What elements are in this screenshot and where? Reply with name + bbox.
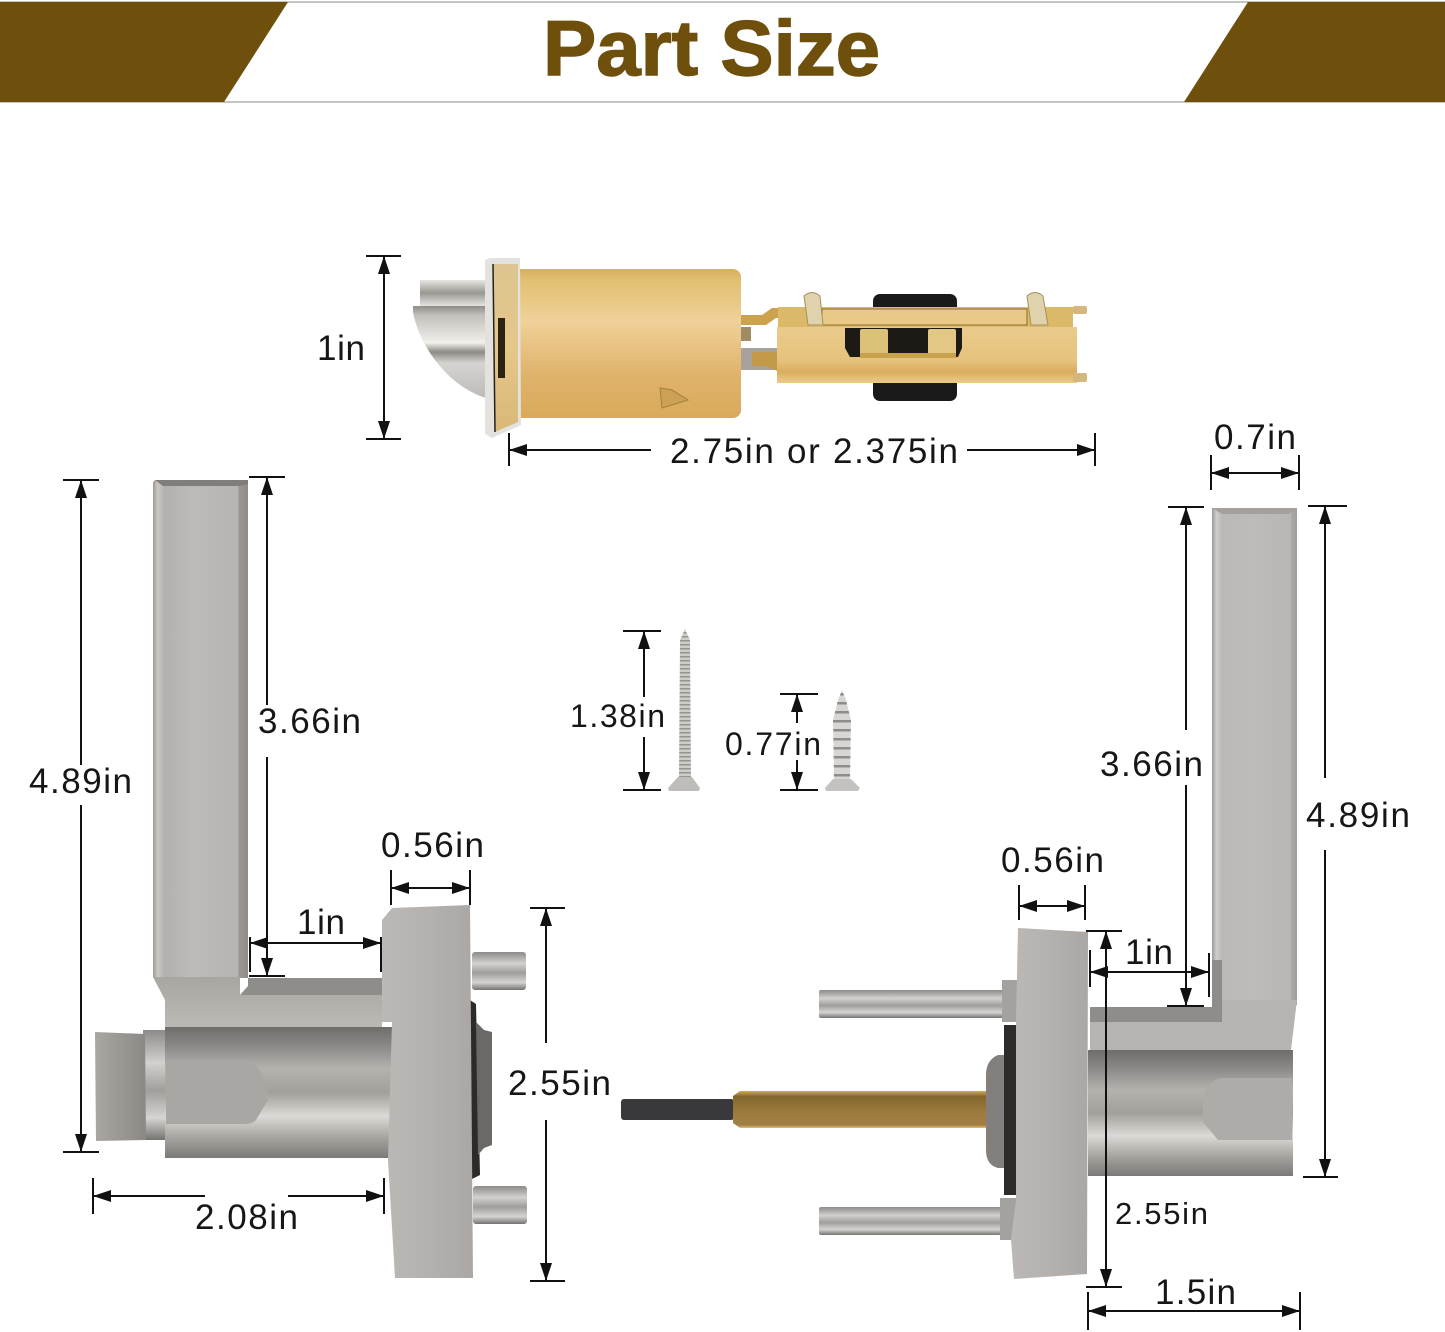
right back hub — [1004, 1025, 1017, 1195]
dimension: left plate height 2.55in — [508, 908, 611, 1281]
right lever — [621, 508, 1297, 1279]
dimension: handle width 0.7in: 0.7in — [1214, 418, 1296, 457]
dimension: left handle 3.66in — [249, 477, 361, 976]
dimension: right overall height 4.89in: 4.89in — [1306, 796, 1410, 835]
screw: short — [825, 690, 860, 791]
right barrel — [1088, 1050, 1293, 1176]
left back hub — [470, 1000, 480, 1180]
dimension: deadbolt length: 2.75in or 2.375in — [670, 432, 958, 471]
latch tabs — [804, 292, 823, 325]
cylinder — [512, 269, 741, 418]
screw: long — [668, 629, 700, 791]
right studs — [819, 990, 1004, 1018]
dimension: left depth 2.08in — [93, 1178, 384, 1237]
black rod — [621, 1099, 734, 1120]
dimension: right gap 1in — [1090, 933, 1209, 997]
brass spindle — [733, 1091, 986, 1128]
dimension: right plate height 2.55in: 2.55in — [1115, 1196, 1208, 1231]
right rose plate — [1011, 928, 1088, 1279]
dimension: left gap 1in: 1in — [297, 903, 345, 942]
dimension: right handle 3.66in — [1100, 507, 1204, 1006]
right banner accent — [1184, 2, 1445, 102]
dimension: left gap 1in — [250, 903, 381, 972]
dimension: right gap 1in: 1in — [1125, 933, 1173, 972]
cylinder notch — [660, 388, 688, 408]
dimension: deadbolt length — [509, 432, 1095, 471]
bolt nose — [420, 280, 486, 306]
dimension: left handle 3.66in: 3.66in — [258, 702, 361, 741]
dimension: left plate height 2.55in: 2.55in — [508, 1064, 611, 1103]
dimension: right plate 0.56in: 0.56in — [1001, 841, 1104, 880]
dimension: deadbolt height 1in — [317, 256, 401, 439]
dimension: left depth 2.08in: 2.08in — [195, 1198, 298, 1237]
dimension: handle width 0.7in — [1211, 418, 1299, 490]
left banner accent — [0, 2, 288, 102]
dimension: right depth 1.5in: 1.5in — [1155, 1273, 1236, 1312]
dimension: deadbolt height 1in: 1in — [317, 329, 365, 368]
dimension: short screw 0.77in: 0.77in — [725, 726, 821, 762]
latch prongs — [1073, 306, 1087, 314]
left lever — [95, 480, 527, 1278]
dimension: left plate 0.56in: 0.56in — [381, 826, 484, 865]
left studs — [472, 952, 526, 990]
right handle — [1212, 508, 1297, 1005]
black roller — [873, 294, 957, 401]
dimension: short screw 0.77in — [725, 694, 821, 790]
linkage — [741, 308, 782, 325]
header banner — [0, 2, 1445, 102]
left handle — [153, 480, 248, 978]
face plate — [485, 258, 521, 438]
dimension: right depth 1.5in — [1088, 1273, 1300, 1330]
dimension: right plate 0.56in — [1001, 841, 1104, 920]
title: Part Size — [543, 4, 880, 92]
left rose plate — [382, 905, 473, 1278]
dimension: right plate height 2.55in — [1086, 931, 1208, 1287]
latch body — [777, 327, 1077, 383]
dimension: long screw 1.38in — [570, 631, 665, 790]
latch top bar — [778, 307, 1073, 327]
left barrel — [165, 1027, 393, 1158]
dimension: right overall height 4.89in — [1303, 506, 1410, 1177]
latch window — [845, 328, 962, 357]
dimension: right handle 3.66in: 3.66in — [1100, 745, 1203, 784]
left thumb turn — [143, 1030, 167, 1140]
dimension: left overall height 4.89in: 4.89in — [29, 762, 132, 801]
dimension: long screw 1.38in: 1.38in — [570, 698, 665, 734]
deadbolt illustration — [413, 258, 1087, 438]
dimension: left overall height 4.89in — [29, 480, 132, 1152]
dimension: left plate 0.56in — [381, 826, 484, 905]
